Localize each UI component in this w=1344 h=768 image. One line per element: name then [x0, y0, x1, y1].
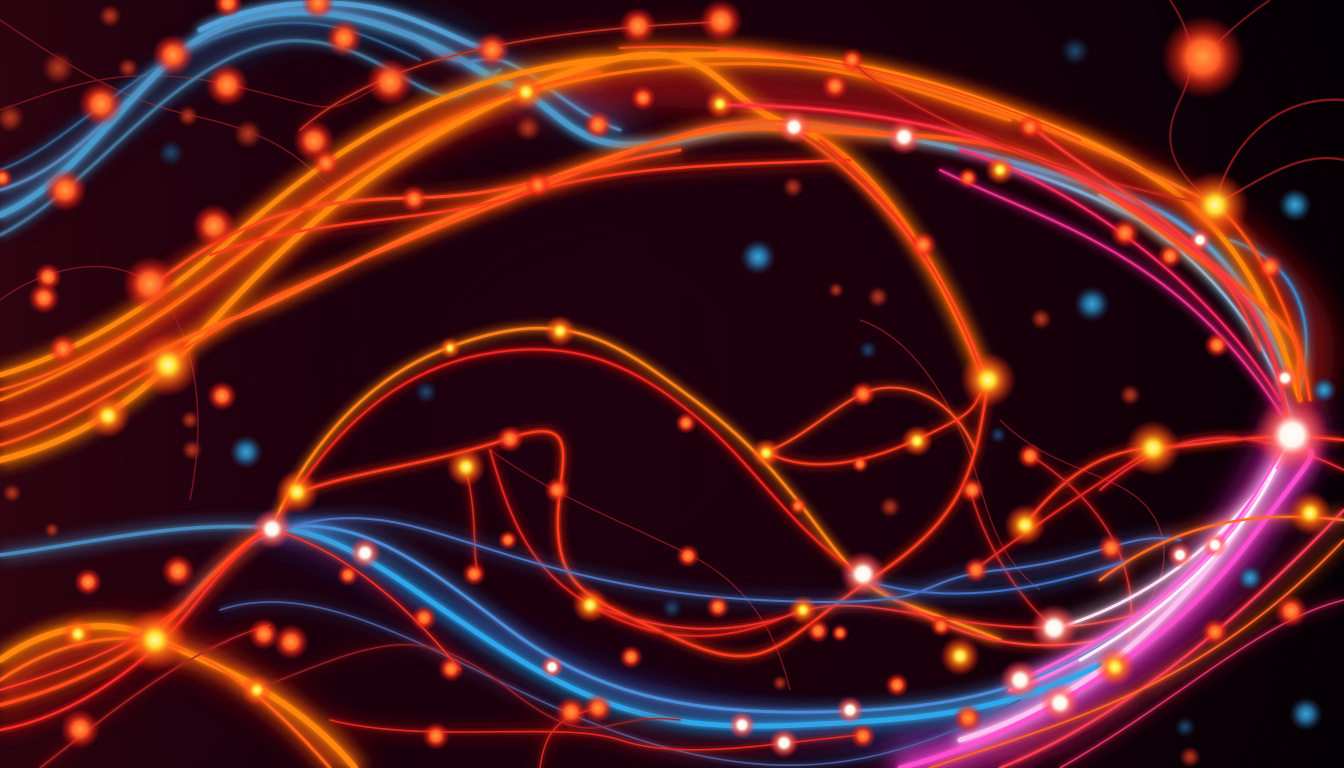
- yellow nodes: [61, 74, 1332, 706]
- red filaments top right: [720, 60, 1310, 430]
- white hot nodes: [252, 110, 1330, 758]
- blue and pink lower bundle: [0, 430, 1344, 768]
- central red curves: [272, 328, 1344, 656]
- orange lower-left bundle: [0, 528, 860, 768]
- blue filaments top left: [0, 3, 790, 235]
- orange main bundle: [0, 22, 1300, 460]
- blue filaments right: [790, 125, 1306, 420]
